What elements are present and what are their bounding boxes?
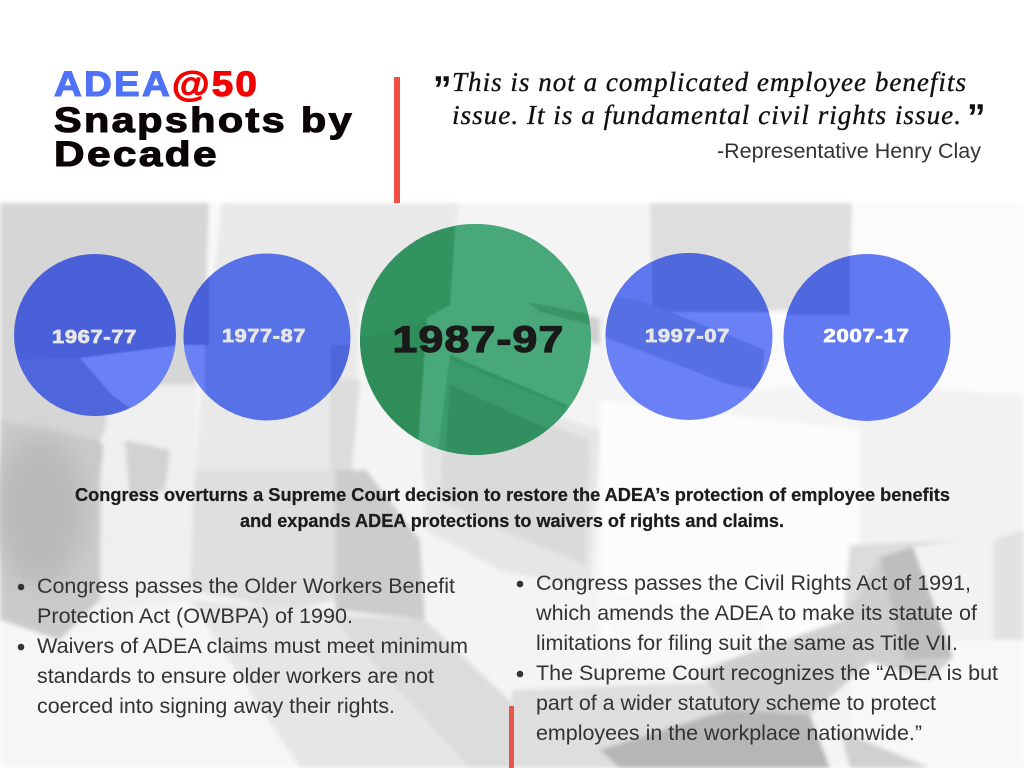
circle: 1977-87: 1977-87 [222,325,306,346]
title line: ADEA@50: ADEA @50 [54,65,259,104]
quote [433,67,986,138]
right bullet list: Congress passes the Civil Rights Act of 1991, [536,570,971,595]
bottom accent bar [509,706,514,768]
timeline circles [0,218,951,460]
left bullet list: Waivers of ADEA claims must meet minimum [37,633,468,658]
title line: Snapshots by: Snapshots by [54,101,354,140]
quote line 1: This is not a complicated employee benefits [452,67,967,97]
opening quotation mark: ” [433,69,452,110]
left bullet list: standards to ensure older workers are not [37,663,434,688]
summary heading: Congress overturns a Supreme Court decision to restore the ADEA’s protection of employee benefits [75,484,950,505]
right bullet list: The Supreme Court recognizes the “ADEA is but [536,660,998,685]
right bullet list: employees in the workplace nationwide.” [536,720,922,745]
circle: 1987-97 (active): 1987-97 [392,319,564,360]
circle: 2007-17: 2007-17 [824,325,910,346]
closing quotation mark: ” [967,97,986,138]
circle: 1997-07 [606,253,772,420]
left bullet list [18,573,468,718]
header background [0,0,1024,203]
background mottled shadow, lower left [0,435,85,585]
right bullet list: which amends the ADEA to make its statute of [535,600,978,625]
right bullet list: limitations for filing suit the same as Title VII. [536,630,958,655]
right bullet list [517,570,998,745]
summary heading: and expands ADEA protections to waivers of rights and claims. [240,510,784,531]
circle: 1977-87 [184,254,350,420]
title [54,65,354,174]
title line: Decade: Decade [54,135,219,174]
left bullet list: Congress passes the Older Workers Benefit [37,573,455,598]
left bullet list: coerced into signing away their rights. [37,693,395,718]
header divider bar [394,77,400,203]
circle: 1997-07: 1997-07 [645,325,730,346]
circle: 2007-17 [784,254,950,421]
quote line 2: issue. It is a fundamental civil rights issue. [452,100,962,130]
right bullet list: part of a wider statutory scheme to protect [536,690,936,715]
quote attribution: -Representative Henry Clay [717,140,982,163]
summary heading [75,484,950,531]
circle: 1987-97 (active) [360,224,591,455]
circle: 1967-77 [14,254,176,416]
left bullet list: Protection Act (OWBPA) of 1990. [37,603,353,628]
circle: 1967-77: 1967-77 [52,326,137,347]
background photo: vintage computer desk [0,203,1024,768]
